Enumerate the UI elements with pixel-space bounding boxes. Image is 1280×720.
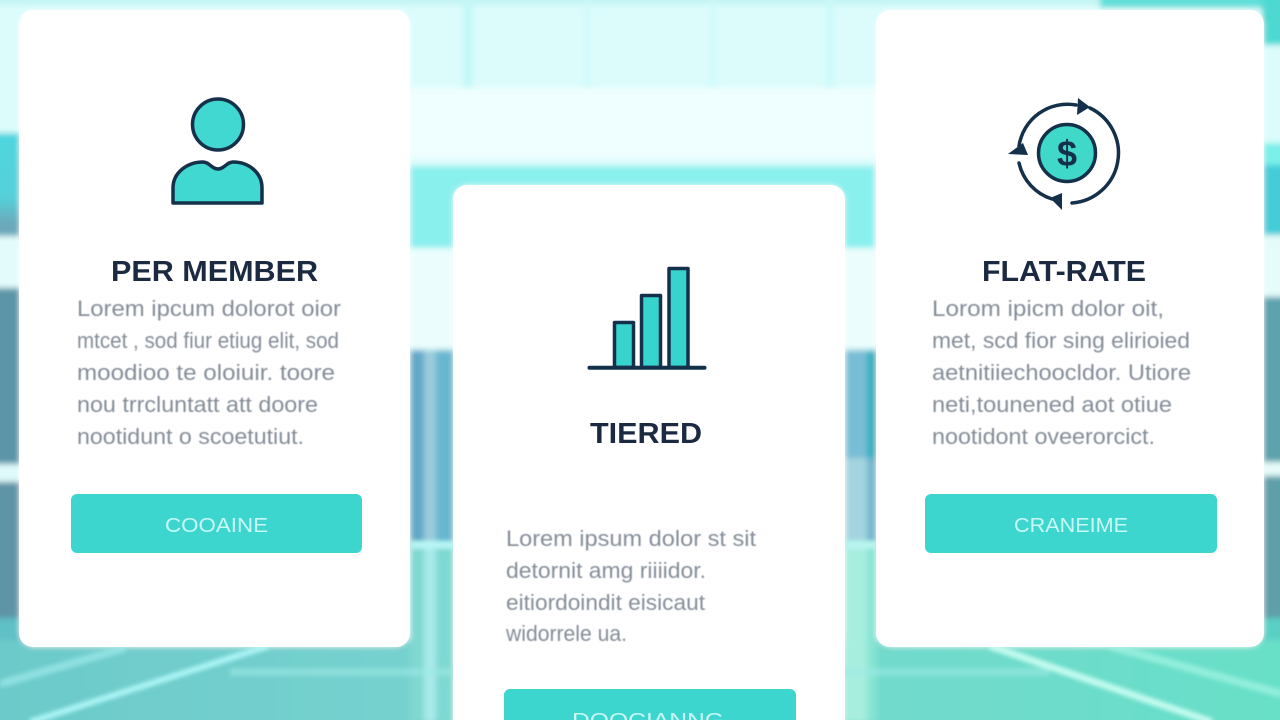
text block: flat-rate description: [932, 296, 1191, 449]
icon: dollar coin with cycle arrows: [1008, 98, 1118, 210]
text block: per member description: mtcet , sod fiur etiug elit, sod: [77, 328, 339, 353]
button: flat-rate: CRANEIME: [1014, 515, 1128, 537]
button: per member: [71, 494, 362, 553]
panel: per member: [19, 10, 410, 647]
text block: tiered description: widorrele ua.: [505, 621, 627, 646]
text block: per member description: moodioo te oloiuir. toore: [77, 360, 335, 385]
heading: flat-rate: FLAT-RATE: [982, 256, 1146, 288]
heading: tiered: TIERED: [590, 418, 702, 450]
heading: per member: PER MEMBER: [111, 256, 318, 288]
icon: person: [173, 99, 262, 203]
text block: per member description: [77, 296, 341, 449]
text block: flat-rate description: met, scd fior sing elirioied: [932, 328, 1190, 353]
panel: flat-rate: [876, 10, 1264, 647]
text block: flat-rate description: nootidont oveerorcict.: [932, 424, 1155, 449]
background: light streaks: [0, 541, 1280, 720]
text block: tiered description: Lorem ipsum dolor st sit: [506, 526, 756, 551]
icon: dollar coin with cycle arrows: $: [1057, 133, 1077, 174]
text block: per member description: Lorem ipcum dolorot oior: [77, 296, 341, 321]
button: tiered: [504, 689, 796, 720]
text block: tiered description: [505, 526, 756, 646]
text block: tiered description: detornit amg riiiidor.: [506, 558, 706, 583]
text block: flat-rate description: Lorom ipicm dolor oit,: [932, 296, 1164, 321]
panel: tiered: [453, 185, 845, 720]
text block: flat-rate description: neti,tounened aot otiue: [932, 392, 1172, 417]
text block: tiered description: eitiordoindit eisicaut: [506, 590, 705, 615]
button: flat-rate: [925, 494, 1217, 553]
text block: flat-rate description: aetnitiiechoocldor. Utiore: [932, 360, 1191, 385]
icon: bar chart: [590, 268, 704, 368]
button: per member: COOAINE: [165, 515, 268, 537]
text block: per member description: nou trrcluntatt att doore: [77, 392, 318, 417]
text block: per member description: nootidunt o scoetutiut.: [77, 424, 304, 449]
